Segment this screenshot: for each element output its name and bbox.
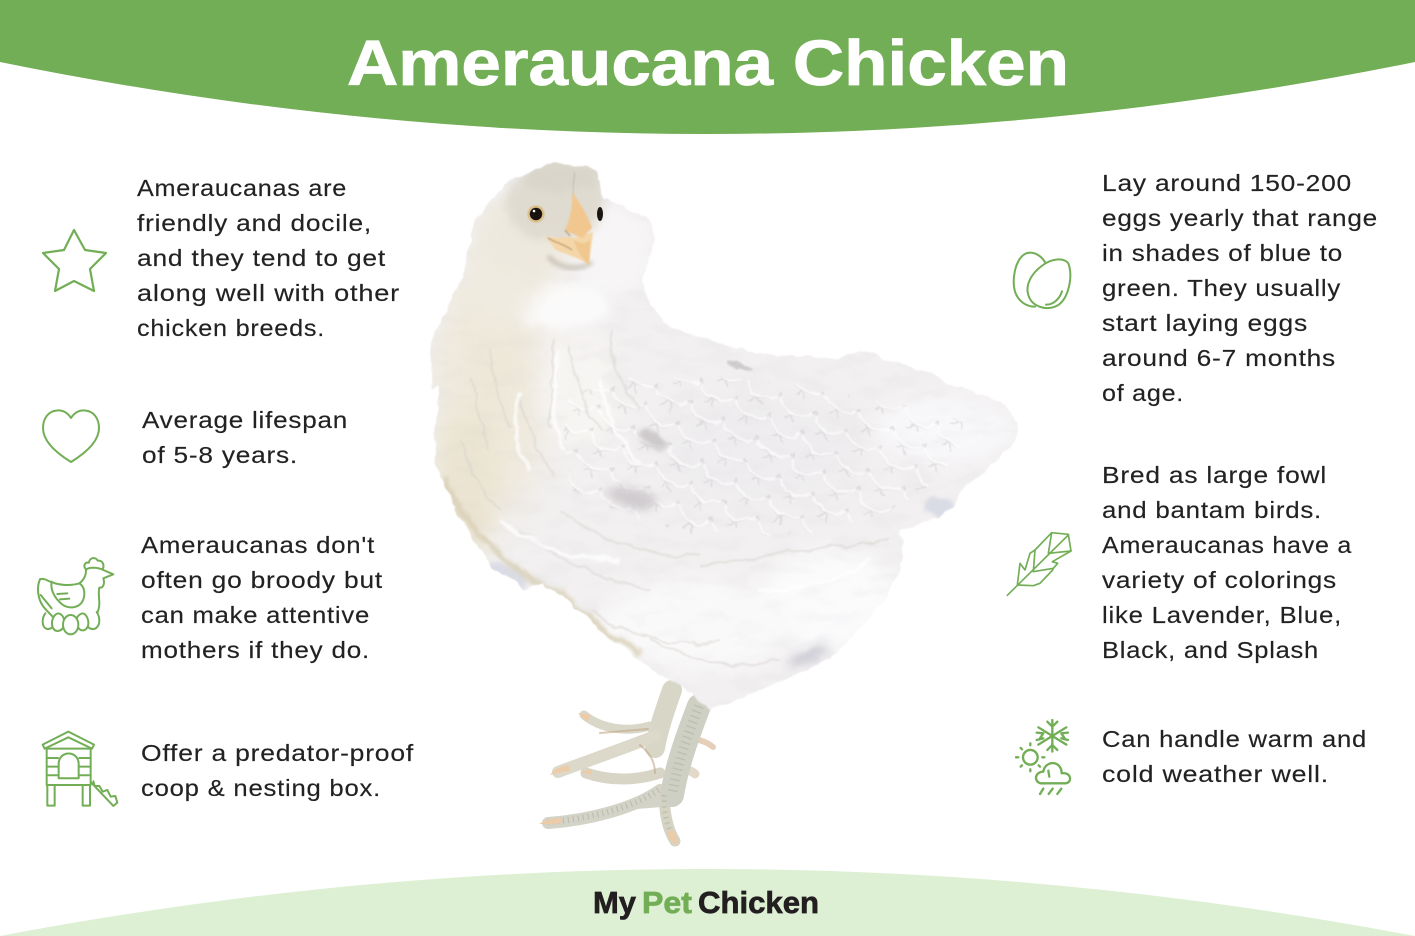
- text: size and colors: Bred as large fowl: [1102, 462, 1327, 488]
- icon: star: [43, 230, 106, 291]
- text: coop: Offer a predator-proof: [141, 740, 414, 766]
- icon: eggs: [1014, 253, 1070, 308]
- text: size and colors: Ameraucanas have a: [1102, 532, 1352, 558]
- text: eggs: eggs yearly that range: [1102, 205, 1378, 231]
- chicken face: [528, 172, 603, 268]
- text: weather: Can handle warm and: [1102, 726, 1367, 752]
- text: size and colors: and bantam birds.: [1102, 497, 1322, 523]
- text: lifespan: Average lifespan: [142, 407, 348, 433]
- text: eggs: around 6-7 months: [1102, 345, 1336, 371]
- icon: weather: [1016, 720, 1070, 794]
- text: weather: cold weather well.: [1102, 761, 1329, 787]
- logo: My Pet Chicken: Chicken: [698, 885, 819, 920]
- chicken illustration: [425, 158, 1025, 846]
- text: size and colors: like Lavender, Blue,: [1102, 602, 1342, 628]
- header banner: [0, 0, 1415, 134]
- text: friendly and docile: friendly and docile,: [137, 210, 372, 236]
- chicken legs and feet: [539, 690, 713, 846]
- head cap: [505, 158, 607, 242]
- feather texture: [460, 330, 890, 665]
- neck ruff: [614, 232, 642, 277]
- text: eggs: in shades of blue to: [1102, 240, 1343, 266]
- eye right: [597, 207, 603, 221]
- text: friendly and docile: Ameraucanas are: [137, 175, 347, 201]
- text: eggs: of age.: [1102, 380, 1184, 406]
- text: friendly and docile: chicken breeds.: [137, 315, 325, 341]
- text: friendly and docile: along well with other: [137, 280, 400, 306]
- cheek: [472, 195, 568, 295]
- text: broodiness: Ameraucanas don't: [141, 532, 375, 558]
- text: eggs: Lay around 150-200: [1102, 170, 1352, 196]
- icon: feather: [1007, 533, 1071, 595]
- text: size and colors: Black, and Splash: [1102, 637, 1319, 663]
- title: Ameraucana Chicken: [347, 27, 1069, 99]
- logo: My Pet Chicken: [593, 885, 819, 920]
- text: coop: [141, 740, 414, 801]
- text: lifespan: of 5-8 years.: [142, 442, 298, 468]
- text: lifespan: [142, 407, 348, 468]
- text: eggs: [1102, 170, 1378, 406]
- icon: hen on eggs: [38, 558, 113, 634]
- icon: chicken coop: [43, 732, 117, 806]
- text: broodiness: can make attentive: [141, 602, 370, 628]
- text: broodiness: often go broody but: [141, 567, 383, 593]
- beak: [545, 192, 593, 265]
- icon: heart: [43, 410, 99, 462]
- text: eggs: green. They usually: [1102, 275, 1341, 301]
- text: size and colors: variety of colorings: [1102, 567, 1337, 593]
- text: friendly and docile: and they tend to get: [137, 245, 386, 271]
- logo: My Pet Chicken: Pet: [642, 885, 692, 920]
- text: friendly and docile: [137, 175, 400, 341]
- text: eggs: start laying eggs: [1102, 310, 1308, 336]
- text: coop: coop & nesting box.: [141, 775, 381, 801]
- text: broodiness: mothers if they do.: [141, 637, 370, 663]
- text: broodiness: [141, 532, 383, 663]
- eye left: [528, 206, 544, 222]
- text: size and colors: [1102, 462, 1352, 663]
- chicken body: [425, 158, 1025, 720]
- logo: My Pet Chicken: My: [593, 885, 637, 920]
- toe claws: [539, 713, 679, 846]
- footer banner: [0, 869, 1415, 936]
- text: weather: [1102, 726, 1367, 787]
- leg scales: [548, 789, 660, 822]
